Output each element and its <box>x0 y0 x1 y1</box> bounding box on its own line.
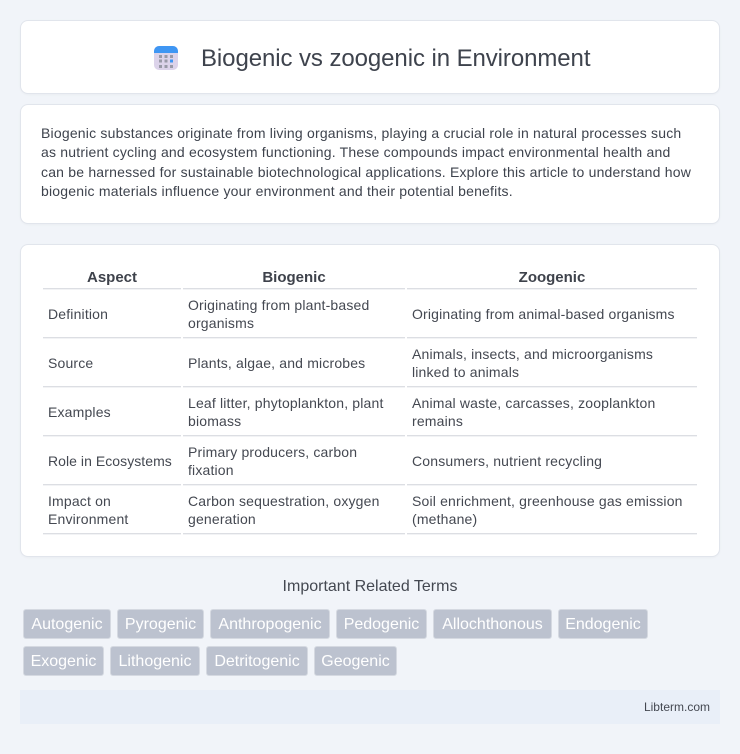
footer bar <box>20 690 720 724</box>
related term tags: Geogenic <box>321 653 390 670</box>
related term tags: Pyrogenic <box>125 616 196 633</box>
comparison table: fixation <box>188 462 234 478</box>
comparison table: Leaf litter, phytoplankton, plant <box>188 395 384 411</box>
intro text <box>41 125 691 199</box>
intro text: can be harnessed for sustainable biotechnological applications. Explore this article to understand how <box>41 164 691 180</box>
comparison table: Animals, insects, and microorganisms <box>412 346 653 362</box>
related term tags: Allochthonous <box>442 616 543 633</box>
comparison table: Primary producers, carbon <box>188 444 357 460</box>
intro card <box>20 104 720 224</box>
comparison table: Examples <box>48 404 111 420</box>
related term tags: Anthropogenic <box>218 616 322 633</box>
related term tags: Lithogenic <box>119 653 191 670</box>
comparison table <box>43 269 697 535</box>
footer brand: Libterm.com <box>644 700 710 714</box>
comparison table: Originating from plant-based <box>188 297 369 313</box>
related term tags: Pedogenic <box>344 616 419 633</box>
comparison table: Soil enrichment, greenhouse gas emission <box>412 493 683 509</box>
comparison table: organisms <box>188 315 254 331</box>
comparison table: Plants, algae, and microbes <box>188 355 365 371</box>
title card <box>20 20 720 94</box>
title: Biogenic vs zoogenic in Environment <box>201 45 590 72</box>
intro text: biogenic materials influence your environment and their potential benefits. <box>41 183 513 199</box>
comparison table: Definition <box>48 306 108 322</box>
related term tags: Autogenic <box>31 616 103 633</box>
icon: calendar <box>154 46 178 70</box>
comparison table: Role in Ecosystems <box>48 453 172 469</box>
related term tags <box>23 609 648 676</box>
table card <box>20 244 720 557</box>
related term tags: Detritogenic <box>214 653 300 670</box>
comparison table: (methane) <box>412 511 477 527</box>
comparison table: Consumers, nutrient recycling <box>412 453 602 469</box>
related term tags: Exogenic <box>31 653 96 670</box>
comparison table: Aspect <box>87 269 137 286</box>
comparison table: Environment <box>48 511 128 527</box>
comparison table: linked to animals <box>412 364 519 380</box>
intro text: Biogenic substances originate from living organisms, playing a crucial role in natural processes such <box>41 125 681 141</box>
comparison table: Carbon sequestration, oxygen <box>188 493 380 509</box>
related terms heading: Important Related Terms <box>283 578 457 595</box>
comparison table: Biogenic <box>262 269 326 286</box>
comparison table: Zoogenic <box>519 269 585 286</box>
comparison table: Impact on <box>48 493 111 509</box>
comparison table: remains <box>412 413 463 429</box>
comparison table: generation <box>188 511 256 527</box>
related term tags: Endogenic <box>565 616 641 633</box>
comparison table: biomass <box>188 413 241 429</box>
intro text: as nutrient cycling and ecosystem functioning. These compounds impact environmental health and <box>41 144 670 160</box>
comparison table: Originating from animal-based organisms <box>412 306 675 322</box>
comparison table: Source <box>48 355 93 371</box>
comparison table: Animal waste, carcasses, zooplankton <box>412 395 655 411</box>
